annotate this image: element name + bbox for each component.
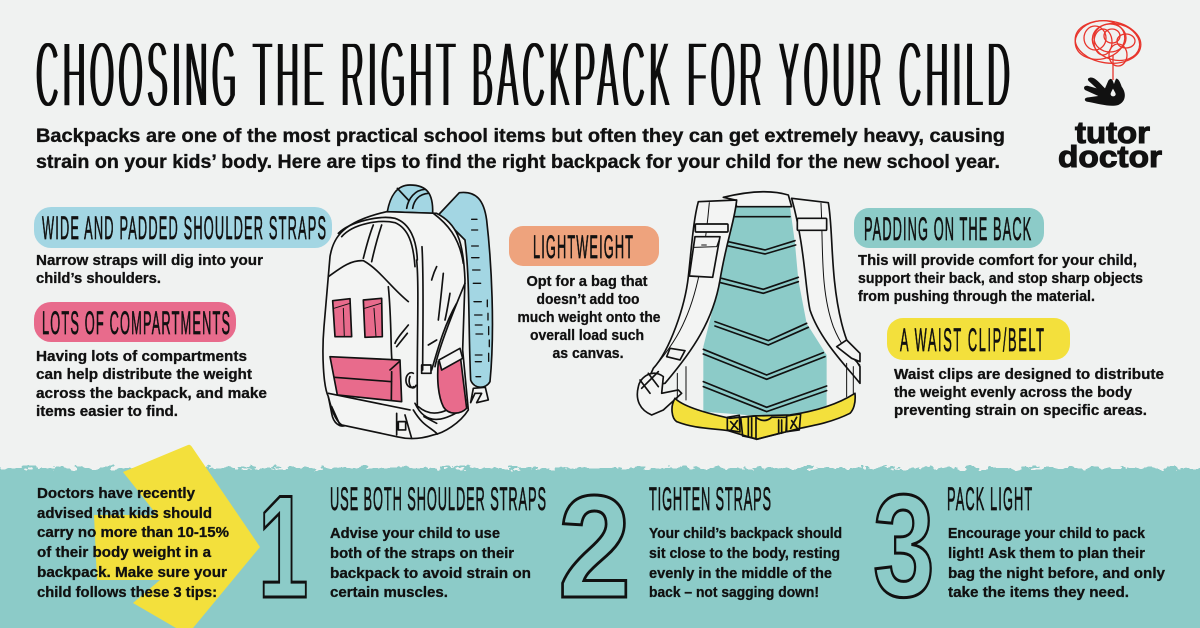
body text: This will provide comfort for your child, [858, 253, 1137, 269]
body text [36, 349, 267, 420]
panel: wide and padded shoulder straps [34, 207, 332, 287]
body text [518, 274, 660, 362]
icon: red scribble brain [1072, 16, 1144, 80]
zip and panel seams [328, 213, 467, 438]
callout: doctors advice [37, 486, 229, 601]
number 1: 1 [258, 465, 308, 628]
body text [649, 526, 842, 601]
body text [858, 253, 1143, 305]
yellow waist belt [672, 393, 855, 439]
callout: doctors advice: Doctors have recently [37, 486, 195, 502]
callout: doctors advice: advised that kids should [37, 506, 212, 522]
callout: doctors advice: carry no more than 10-15% [37, 525, 229, 541]
left strap pocket [689, 237, 720, 277]
chevron padding seams [703, 217, 827, 412]
heading: USE BOTH SHOULDER STRAPS [330, 482, 546, 518]
panel: lightweight [509, 226, 660, 362]
body text: Encourage your child to pack [948, 526, 1146, 542]
body text: back – not sagging down! [649, 585, 819, 601]
heading: WIDE AND PADDED SHOULDER STRAPS [42, 211, 326, 247]
body text: certain muscles. [330, 585, 448, 601]
left buckle and tag [667, 348, 685, 360]
logo wordmark [1058, 115, 1162, 174]
heading: LIGHTWEIGHT [533, 230, 633, 266]
number 3: 3 [873, 465, 935, 628]
body text: Waist clips are designed to distribute [894, 367, 1164, 383]
icon: yellow arrow [94, 445, 260, 628]
body text: much weight onto the [518, 310, 660, 326]
body text: Narrow straps will dig into your [36, 253, 263, 269]
callout: doctors advice: backpack. Make sure your [37, 565, 227, 581]
label pill [854, 208, 1044, 248]
body text [894, 367, 1164, 419]
body text: evenly in the middle of the [649, 566, 832, 582]
panel: lots of compartments [34, 302, 267, 420]
label pill [34, 302, 236, 342]
right strap [792, 198, 860, 383]
heading: PADDING ON THE BACK [864, 212, 1031, 248]
body text: both of the straps on their [330, 546, 514, 562]
body text [948, 526, 1165, 601]
tip 3: pack light [873, 465, 1165, 628]
tip 1: use both shoulder straps [258, 465, 546, 628]
body text: child’s shoulders. [36, 271, 161, 287]
title: CHOOSING THE RIGHT BACKPACK FOR YOUR CHILD [36, 21, 1010, 127]
body text: preventing strain on specific areas. [894, 403, 1147, 419]
icon: hand [1084, 77, 1125, 106]
bottom left loop [328, 397, 347, 426]
label pill [887, 318, 1070, 360]
pink small pockets [333, 299, 352, 337]
body text [36, 253, 263, 287]
logo wordmark: doctor [1058, 139, 1162, 174]
body text: Opt for a bag that [526, 274, 648, 290]
heading: A WAIST CLIP/BELT [900, 323, 1044, 359]
intro text [36, 125, 1005, 173]
pink bottle pocket [438, 353, 467, 413]
main body [323, 212, 468, 439]
heading: LOTS OF COMPARTMENTS [42, 306, 230, 342]
body text: items easier to find. [36, 404, 178, 420]
teal back padding [703, 207, 827, 417]
label pill [509, 226, 659, 266]
callout: doctors advice: child follows these 3 tips: [37, 585, 217, 601]
illustration: backpack back view [637, 192, 860, 439]
logo: tutor doctor [1058, 16, 1162, 174]
body text: light! Ask them to plan their [948, 546, 1145, 562]
body text [330, 526, 531, 601]
top handle [723, 192, 792, 207]
intro text: Backpacks are one of the most practical school items but often they can get extremely heavy, causing [36, 125, 1005, 147]
number 2: 2 [558, 466, 631, 628]
body text: backpack to avoid strain on [330, 566, 531, 582]
body text: Having lots of compartments [36, 349, 247, 365]
tip 2: tighten straps [558, 466, 842, 628]
body text: overall load such [530, 328, 644, 344]
heading: TIGHTEN STRAPS [649, 482, 771, 518]
body text: bag the night before, and only [948, 566, 1165, 582]
left strap [645, 200, 737, 387]
pink large pocket [330, 357, 402, 402]
body text: the weight evenly across the body [894, 385, 1132, 401]
right shoulder strap [438, 192, 492, 387]
left top strap [387, 185, 433, 213]
body text: as canvas. [552, 346, 624, 362]
bottom teal band [0, 468, 1200, 628]
body text: support their back, and stop sharp objects [858, 271, 1143, 287]
panel: padding on the back [854, 208, 1143, 305]
logo wordmark: tutor [1075, 115, 1150, 150]
callout: doctors advice: of their body weight in a [37, 545, 212, 561]
body text: can help distribute the weight [36, 367, 252, 383]
illustration: backpack front view [323, 185, 492, 439]
body text: sit close to the body, resting [649, 546, 840, 562]
label pill [34, 207, 332, 248]
body text: across the backpack, and make [36, 386, 267, 402]
body text: Advise your child to use [330, 526, 500, 542]
body text: doesn’t add too [536, 292, 640, 308]
heading: PACK LIGHT [947, 482, 1032, 518]
intro text: strain on your kids’ body. Here are tips to find the right backpack for your child for the new school year. [36, 151, 1000, 173]
body text: take the items they need. [948, 585, 1129, 601]
panel: a waist clip/belt [887, 318, 1164, 419]
body text: from pushing through the material. [858, 289, 1095, 305]
body text: Your child’s backpack should [649, 526, 842, 542]
strap buckle [471, 387, 488, 403]
